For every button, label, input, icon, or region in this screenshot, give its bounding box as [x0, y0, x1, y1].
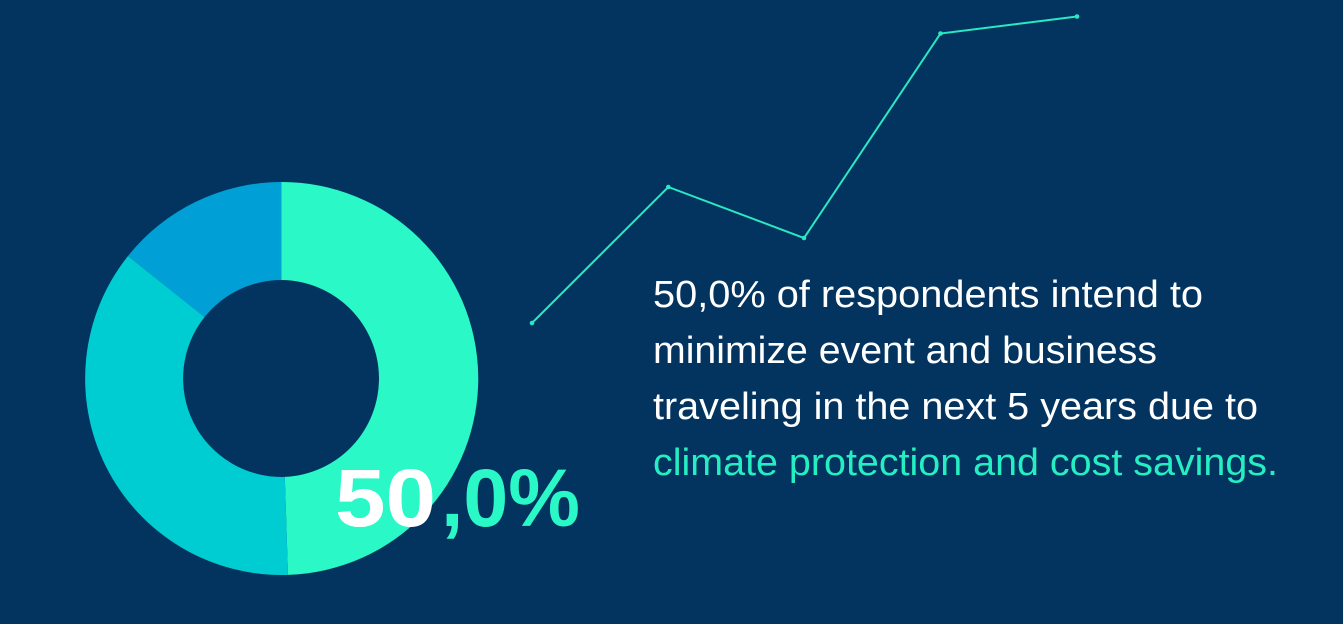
slice: 50,0% [282, 182, 478, 575]
slice: second share [85, 256, 288, 575]
big percentage value [335, 453, 580, 544]
big percentage value: 50 [335, 453, 436, 544]
description text [653, 274, 1278, 484]
big percentage value: ,0% [441, 453, 580, 544]
description text: 50,0% of respondents intend to [653, 274, 1203, 316]
description text: minimize event and business [653, 330, 1157, 372]
description text: climate protection and cost savings. [653, 442, 1278, 484]
slice: third share [128, 182, 282, 317]
line chart [530, 14, 1079, 325]
description text: traveling in the next 5 years due to [653, 386, 1258, 428]
donut chart [85, 182, 478, 575]
